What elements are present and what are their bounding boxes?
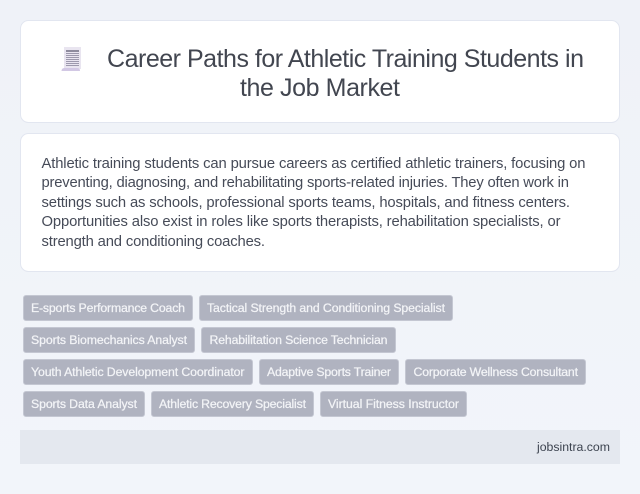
panel: description card	[20, 134, 620, 272]
title: Career Paths for Athletic Training Students in	[107, 45, 584, 73]
title	[107, 45, 584, 102]
footer source text: jobsintra.com	[536, 440, 610, 454]
tag: Virtual Fitness Instructor: Virtual Fitness Instructor	[328, 397, 459, 411]
tag: Adaptive Sports Trainer: Adaptive Sports Trainer	[267, 365, 391, 379]
tag: E-sports Performance Coach	[24, 296, 192, 320]
tag: Adaptive Sports Trainer	[260, 360, 398, 384]
tag: Corporate Wellness Consultant	[406, 360, 586, 384]
title: the Job Market	[240, 74, 400, 102]
footer bar	[20, 430, 620, 464]
tag: E-sports Performance Coach: E-sports Performance Coach	[31, 301, 185, 315]
description text: settings such as schools, professional sports teams, hospitals, and fitness centers.	[42, 195, 570, 211]
tag: Tactical Strength and Conditioning Specialist	[200, 296, 452, 320]
tag: Rehabilitation Science Technician	[202, 328, 396, 352]
tag: Sports Data Analyst	[24, 392, 144, 416]
tag: Youth Athletic Development Coordinator: Youth Athletic Development Coordinator	[31, 365, 244, 379]
description text: preventing, diagnosing, and rehabilitating sports-related injuries. They often work in	[42, 175, 569, 191]
description text: strength and conditioning coaches.	[42, 234, 265, 250]
panel: career tags	[24, 296, 586, 416]
tag: Sports Data Analyst: Sports Data Analyst	[31, 397, 138, 411]
tag: Athletic Recovery Specialist: Athletic Recovery Specialist	[159, 397, 307, 411]
tag: Rehabilitation Science Technician: Rehabilitation Science Technician	[210, 333, 388, 347]
tag: Corporate Wellness Consultant: Corporate Wellness Consultant	[414, 365, 579, 379]
tag: Tactical Strength and Conditioning Specialist: Tactical Strength and Conditioning Specialist	[207, 301, 446, 315]
tag: Virtual Fitness Instructor	[320, 392, 466, 416]
tag: Sports Biomechanics Analyst: Sports Biomechanics Analyst	[31, 333, 188, 347]
description text	[42, 156, 586, 250]
tag: Youth Athletic Development Coordinator	[24, 360, 252, 384]
icon: document scroll	[62, 47, 81, 71]
tag: Sports Biomechanics Analyst	[24, 328, 194, 352]
description text: Athletic training students can pursue careers as certified athletic trainers, focusing on	[42, 156, 586, 172]
tag: Athletic Recovery Specialist	[152, 392, 314, 416]
description text: Opportunities also exist in roles like sports therapists, rehabilitation specialists, or	[42, 214, 561, 230]
panel: title card	[20, 20, 620, 122]
